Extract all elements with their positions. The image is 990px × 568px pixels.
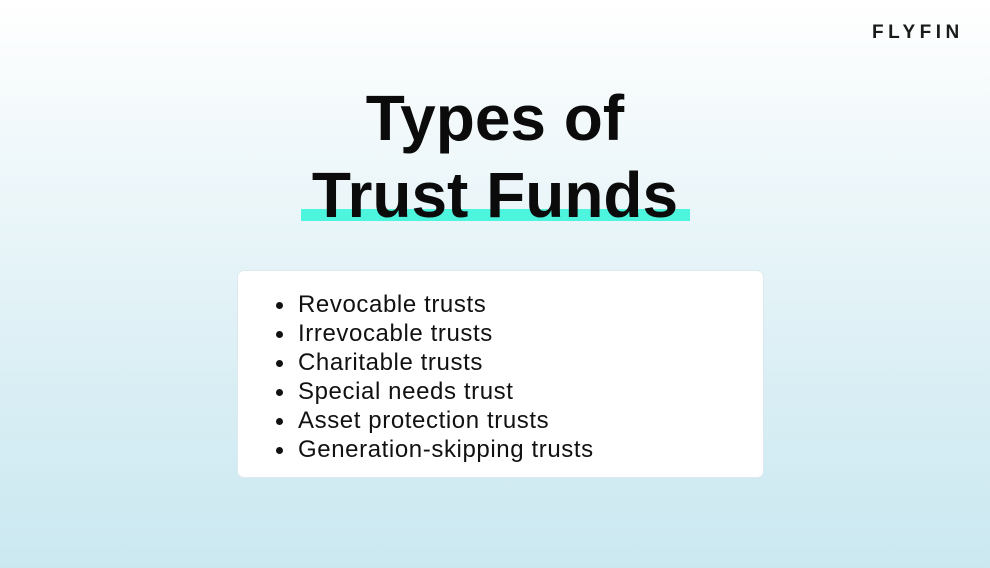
- panel: list of trust types: Asset protection trusts: [298, 407, 549, 434]
- panel: list of trust types: Charitable trusts: [298, 349, 483, 376]
- panel: list of trust types: Special needs trust: [298, 378, 514, 405]
- panel: list of trust types: Irrevocable trusts: [298, 320, 493, 347]
- logo: FLYFIN: [872, 22, 964, 43]
- title: Types of: [366, 82, 624, 154]
- panel: list of trust types: [237, 270, 764, 478]
- title: Trust Funds: [312, 159, 678, 231]
- panel: list of trust types: Revocable trusts: [298, 291, 486, 318]
- title: [312, 82, 678, 231]
- panel: list of trust types: Generation-skipping trusts: [298, 436, 594, 463]
- title highlight bar: [301, 209, 690, 221]
